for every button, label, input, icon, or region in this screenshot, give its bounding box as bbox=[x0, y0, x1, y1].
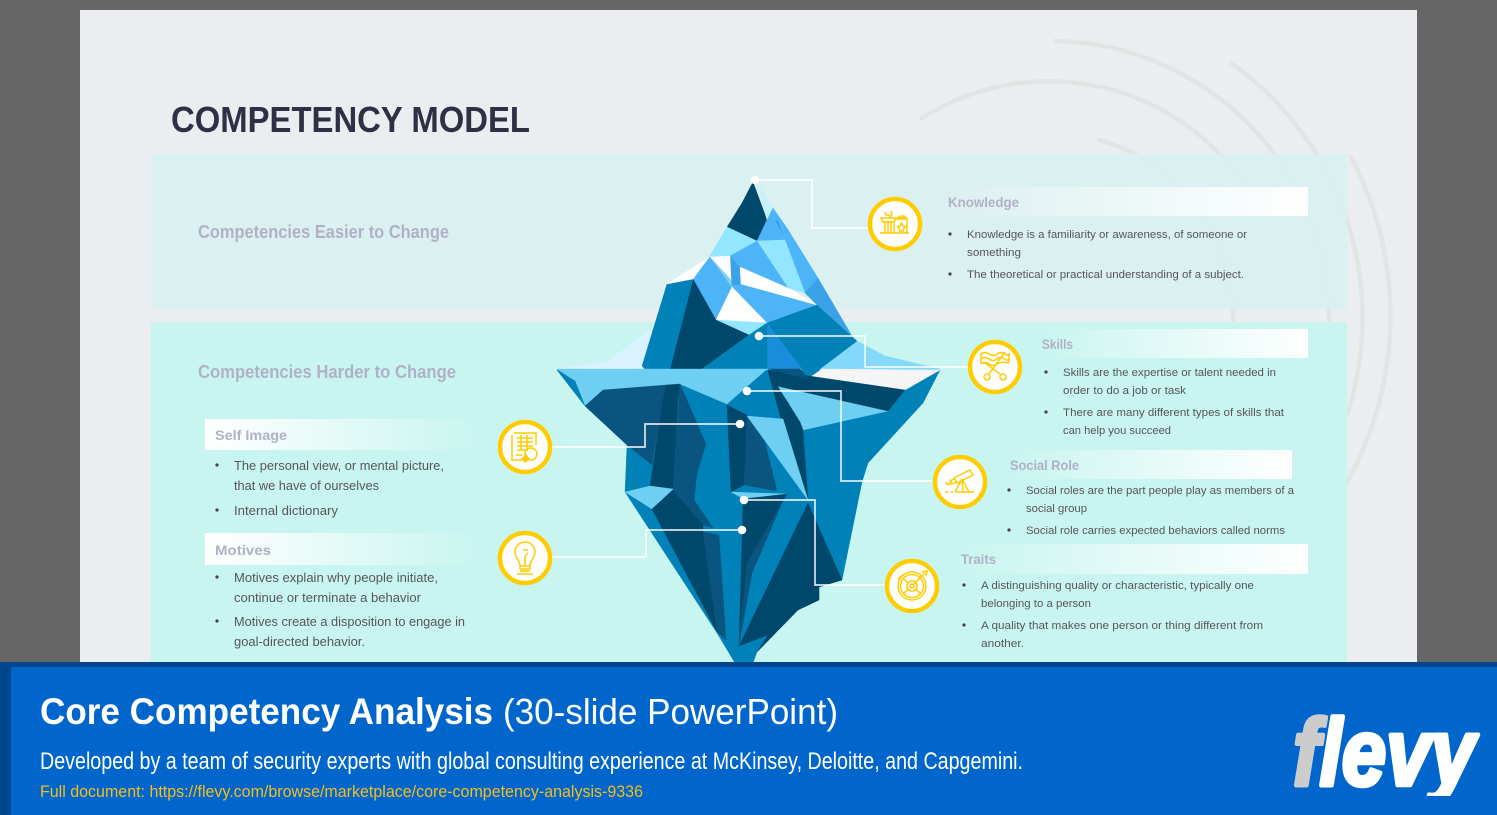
banner background bbox=[0, 662, 1497, 815]
block: traits bbox=[958, 544, 1308, 650]
traits bullets bbox=[962, 580, 1263, 650]
skills heading: Skills bbox=[1042, 336, 1073, 352]
iceberg illustration bbox=[557, 182, 940, 663]
heading: competencies harder to change: Competencies Harder to Change bbox=[198, 362, 456, 382]
knowledge heading: Knowledge bbox=[948, 194, 1019, 210]
social role bullets: Social role carries expected behaviors called norms bbox=[1026, 525, 1286, 537]
self image bullets: The personal view, or mental picture, bbox=[234, 459, 444, 473]
skills bullets: Skills are the expertise or talent needed in bbox=[1063, 367, 1276, 379]
skills bullets: There are many different types of skills that bbox=[1063, 407, 1284, 419]
decorative concentric arcs bbox=[922, 41, 1390, 482]
panel: competencies easier to change bbox=[151, 154, 1347, 309]
traits header bar bbox=[958, 544, 1308, 574]
skills bullets bbox=[1044, 367, 1284, 437]
motives bullets: Motives create a disposition to engage in bbox=[234, 615, 465, 629]
motives heading: Motives bbox=[215, 542, 271, 558]
icon: motives bbox=[500, 533, 550, 583]
traits bullets: A quality that makes one person or thing different from bbox=[981, 620, 1263, 632]
knowledge bullets: The theoretical or practical understanding of a subject. bbox=[967, 269, 1244, 281]
motives bullets: Motives explain why people initiate, bbox=[234, 571, 438, 585]
motives header bar bbox=[205, 533, 475, 565]
connector lines bbox=[552, 176, 970, 585]
knowledge bullets: something bbox=[967, 247, 1021, 259]
banner inner panel bbox=[11, 667, 1497, 815]
self image bullets bbox=[215, 459, 444, 518]
banner slide count: (30-slide PowerPoint) bbox=[503, 691, 838, 732]
icon: self image bbox=[500, 422, 550, 472]
motives bullets bbox=[215, 571, 465, 649]
icon: knowledge bbox=[870, 199, 920, 249]
social role header bar bbox=[1008, 450, 1292, 479]
icon: traits bbox=[887, 561, 937, 611]
social role bullets: social group bbox=[1026, 503, 1087, 515]
motives bullets: continue or terminate a behavior bbox=[234, 591, 421, 605]
traits heading: Traits bbox=[961, 551, 996, 567]
social role bullets: Social roles are the part people play as members of a bbox=[1026, 485, 1295, 497]
traits bullets: A distinguishing quality or characteristic, typically one bbox=[981, 580, 1254, 592]
block: motives bbox=[205, 533, 475, 649]
skills bullets: order to do a job or task bbox=[1063, 385, 1187, 397]
icon: social role bbox=[935, 457, 985, 507]
self image bullets: that we have of ourselves bbox=[234, 479, 379, 493]
banner link: Full document: https://flevy.com/browse/marketplace/core-competency-analysis-9336 bbox=[40, 783, 643, 801]
block: social role bbox=[1007, 450, 1295, 537]
motives bullets: goal-directed behavior. bbox=[234, 635, 365, 649]
self image heading: Self Image bbox=[215, 427, 287, 443]
knowledge header bar bbox=[945, 187, 1308, 216]
skills header bar bbox=[1040, 329, 1308, 358]
title: COMPETENCY MODEL bbox=[171, 99, 530, 140]
knowledge bullets: Knowledge is a familiarity or awareness, of someone or bbox=[967, 229, 1247, 241]
footer banner bbox=[0, 662, 1497, 815]
panel: competencies harder to change bbox=[151, 322, 1347, 667]
self image bullets: Internal dictionary bbox=[234, 504, 339, 518]
social role bullets bbox=[1007, 485, 1295, 537]
traits bullets: another. bbox=[981, 638, 1024, 650]
traits bullets: belonging to a person bbox=[981, 598, 1091, 610]
block: skills bbox=[1040, 329, 1308, 437]
block: knowledge bbox=[945, 187, 1308, 281]
social role heading: Social Role bbox=[1010, 457, 1079, 473]
block: self image bbox=[205, 419, 475, 518]
slide background bbox=[80, 10, 1417, 670]
banner title: Core Competency Analysis bbox=[40, 691, 493, 732]
heading: competencies easier to change: Competencies Easier to Change bbox=[198, 222, 449, 242]
banner subtitle: Developed by a team of security experts with global consulting experience at McKinsey, Deloitte, and Capgemini. bbox=[40, 748, 1023, 775]
self image header bar bbox=[205, 419, 475, 450]
skills bullets: can help you succeed bbox=[1063, 425, 1171, 437]
knowledge bullets bbox=[948, 229, 1247, 281]
icon: skills bbox=[970, 342, 1020, 392]
